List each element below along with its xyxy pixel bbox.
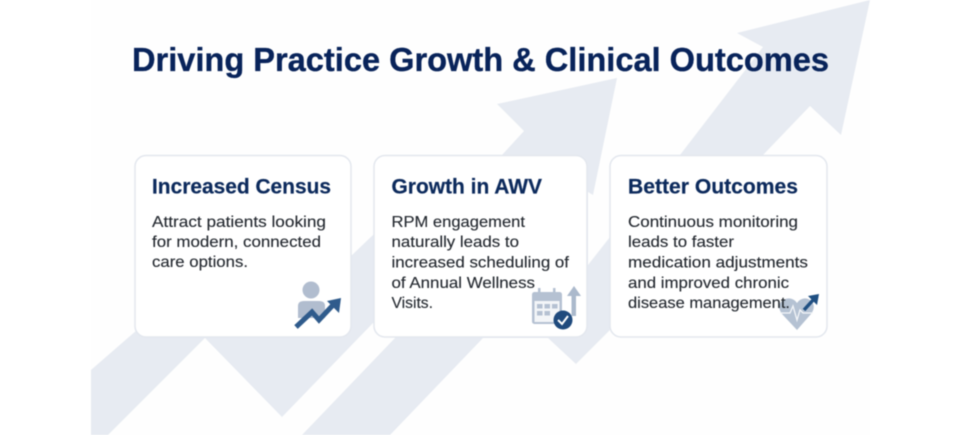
- icon: person with rising arrow: [296, 282, 341, 327]
- icon: calendar with check and up arrow: [532, 286, 581, 330]
- text block: growth in awv: Visits.: [392, 295, 433, 312]
- text block: growth in awv: naturally leads to: [392, 234, 519, 251]
- text block: better outcomes: disease management.: [628, 295, 790, 312]
- text block: increased census: Attract patients looking: [152, 214, 326, 231]
- text block: growth in awv: [392, 214, 570, 312]
- text block: better outcomes: [628, 214, 808, 312]
- text block: increased census: for modern, connected: [152, 234, 321, 251]
- text block: growth in awv: increased scheduling of: [392, 254, 570, 272]
- text block: better outcomes: medication adjustments: [628, 254, 808, 272]
- text block: better outcomes: leads to faster: [628, 234, 735, 251]
- text block: growth in awv: of Annual Wellness: [392, 275, 535, 292]
- text block: better outcomes: and improved chronic: [628, 275, 789, 292]
- heading: better outcomes: Better Outcomes: [628, 176, 798, 198]
- text block: increased census: [152, 214, 326, 271]
- background arrow 1: [91, 78, 617, 435]
- text block: growth in awv: RPM engagement: [392, 214, 526, 231]
- text block: increased census: care options.: [152, 254, 248, 271]
- heading: increased census: Increased Census: [152, 176, 331, 198]
- text block: better outcomes: Continuous monitoring: [628, 214, 798, 231]
- panel: better outcomes: [610, 156, 827, 337]
- icon: heart with pulse and arrow: [779, 294, 819, 330]
- background arrow 2: [302, 0, 870, 435]
- panel: increased census: [135, 156, 351, 337]
- heading: growth in awv: Growth in AWV: [392, 176, 542, 198]
- panel: growth in awv: [374, 156, 587, 337]
- title: Driving Practice Growth & Clinical Outcomes: [132, 41, 829, 78]
